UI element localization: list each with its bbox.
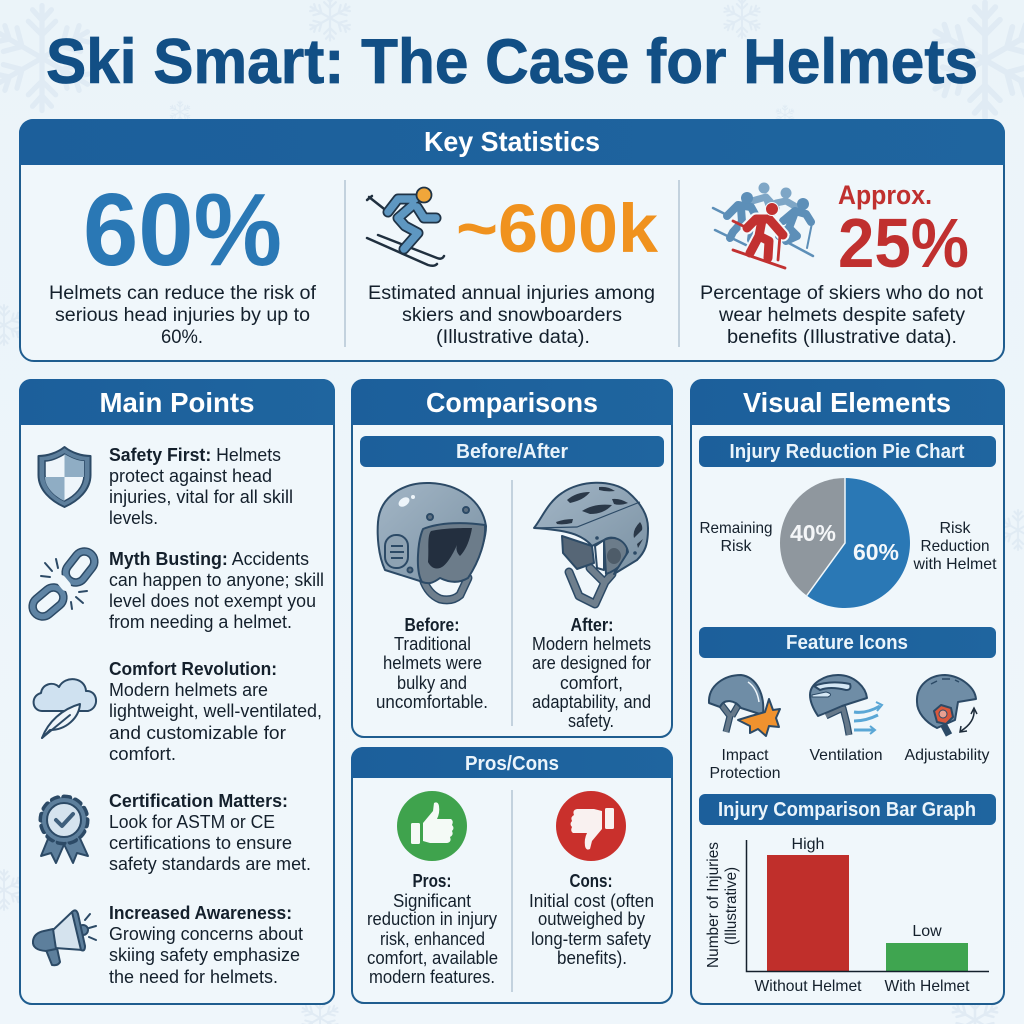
panel: comparisons: helmets were — [383, 653, 482, 673]
point: safety first: protect against head — [109, 466, 272, 486]
pie chart: Reduction — [920, 538, 990, 555]
panel: comparisons: are designed for — [532, 653, 651, 673]
panel: visual elements: Impact — [722, 747, 769, 764]
icon: skier — [367, 188, 444, 266]
point: myth busting: level does not exempt you — [109, 591, 316, 611]
point: myth busting: can happen to anyone; skill — [109, 570, 324, 590]
panel: pros and cons: Pros: — [412, 871, 452, 891]
point: increased awareness: Increased Awareness: — [109, 903, 292, 923]
panel: pros and cons: Cons: — [570, 871, 612, 891]
subheading: pie chart — [699, 436, 996, 467]
icon: broken chain — [29, 547, 98, 621]
icon: cloud and feather — [34, 679, 96, 738]
stat: 25 percent: Approx. — [838, 180, 932, 210]
heading: comparisons: Comparisons — [426, 387, 598, 418]
point: certification matters: Look for ASTM or CE — [109, 812, 275, 832]
panel: comparisons — [351, 379, 673, 737]
icon: ventilation — [810, 675, 882, 735]
panel: visual elements: Adjustability — [904, 747, 990, 764]
point: certification matters: certifications to ensure — [109, 833, 292, 853]
stat: 60 percent — [49, 172, 317, 348]
bar chart: Number of Injuries — [705, 842, 722, 968]
subheading: feature icons — [699, 627, 996, 658]
icon: award badge — [41, 797, 88, 863]
panel: pros and cons: long-term safety — [531, 929, 651, 949]
stat: 60 percent: 60% — [83, 172, 282, 287]
stat: 60 percent: 60%. — [161, 327, 203, 348]
subheading: before/after — [360, 436, 664, 467]
panel: pros and cons — [351, 747, 673, 1003]
stat: 25 percent: 25% — [838, 204, 969, 282]
panel: pros and cons: comfort, available — [367, 948, 498, 968]
point: comfort revolution: Modern helmets are — [109, 680, 268, 700]
pie chart: 40% — [790, 520, 836, 546]
panel: pros and cons: Significant — [393, 891, 471, 911]
heading: main points: Main Points — [100, 387, 254, 418]
point: myth busting: Myth Busting: Accidents — [109, 549, 309, 569]
pie chart: Remaining — [700, 520, 772, 537]
point: comfort revolution: comfort. — [109, 744, 176, 764]
stat: 600k injuries: ~600k — [456, 190, 659, 267]
heading: visual elements: Visual Elements — [743, 387, 951, 418]
panel: comparisons: safety. — [568, 711, 614, 731]
point: increased awareness: skiing safety emphasize — [109, 945, 300, 965]
point: comfort revolution: Comfort Revolution: — [109, 659, 277, 679]
panel: comparisons: adaptability, and — [532, 692, 651, 712]
panel: comparisons: uncomfortable. — [376, 692, 488, 712]
subheading: bar graph: Injury Comparison Bar Graph — [718, 799, 976, 821]
stat: 600k injuries: skiers and snowboarders — [402, 305, 622, 326]
panel: pros and cons: outweighed by — [538, 909, 645, 929]
stat: 60 percent: Helmets can reduce the risk of — [49, 283, 317, 304]
panel: pros and cons: reduction in injury — [367, 909, 497, 929]
point: increased awareness: Growing concerns about — [109, 924, 303, 944]
icon: shield — [38, 447, 90, 507]
panel: comparisons: Modern helmets — [532, 634, 651, 654]
point: certification matters: Certification Matters: — [109, 791, 288, 811]
pie chart: with Helmet — [913, 556, 997, 573]
title: Ski Smart: The Case for Helmets — [46, 27, 978, 97]
panel: pros and cons: Initial cost (often — [529, 891, 654, 911]
point: increased awareness — [33, 903, 303, 987]
panel: pros and cons: risk, enhanced — [380, 929, 485, 949]
panel: pros and cons: benefits). — [557, 948, 627, 968]
point: myth busting — [29, 547, 324, 632]
stat: 600k injuries: Estimated annual injuries among — [368, 283, 655, 304]
icon: modern helmet — [534, 483, 648, 604]
panel: comparisons: Traditional — [394, 634, 471, 654]
stat: 25 percent — [700, 180, 984, 348]
pie chart: Risk — [720, 538, 753, 555]
panel: visual elements — [690, 379, 1005, 1004]
heading: pros/cons: Pros/Cons — [465, 753, 559, 775]
point: safety first: injuries, vital for all skill — [109, 487, 293, 507]
subheading: bar graph — [699, 794, 996, 825]
subheading: feature icons: Feature Icons — [786, 632, 908, 654]
panel: visual elements: Ventilation — [810, 747, 882, 764]
panel: comparisons: bulky and — [397, 673, 467, 693]
pie chart: Risk — [939, 520, 972, 537]
stat: 25 percent: Percentage of skiers who do not — [700, 283, 984, 304]
icon: adjustability — [917, 675, 977, 735]
bar chart — [705, 836, 989, 995]
point: certification matters: safety standards are met. — [109, 854, 311, 874]
subheading: pie chart: Injury Reduction Pie Chart — [730, 441, 965, 463]
icon: impact protection — [709, 675, 780, 736]
panel: comparisons: comfort, — [560, 673, 623, 693]
pie chart: 60% — [853, 539, 899, 565]
bar chart: High — [792, 836, 824, 853]
icon: thumbs up — [397, 791, 467, 861]
panel: comparisons: Before: — [404, 615, 460, 635]
point: comfort revolution: lightweight, well-ventilated, — [109, 701, 322, 721]
stat: 600k injuries — [367, 188, 659, 348]
stat: 60 percent: serious head injuries by up to — [55, 305, 310, 326]
stat: 25 percent: benefits (Illustrative data). — [727, 327, 957, 348]
icon: group of skiers — [713, 182, 813, 268]
pie chart — [700, 478, 997, 608]
point: myth busting: from needing a helmet. — [109, 612, 292, 632]
point: safety first: Safety First: Helmets — [109, 445, 281, 465]
panel: pros and cons: modern features. — [369, 967, 495, 987]
icon: megaphone — [33, 910, 96, 965]
point: safety first: levels. — [109, 508, 158, 528]
bar chart: (Illustrative) — [723, 867, 740, 945]
subheading: before/after: Before/After — [456, 441, 568, 463]
point: comfort revolution: and customizable for — [109, 723, 286, 743]
icon: thumbs down — [556, 791, 626, 861]
icon: traditional helmet — [378, 483, 486, 600]
point: increased awareness: the need for helmets. — [109, 967, 278, 987]
panel: visual elements: Protection — [710, 765, 780, 782]
point: certification matters — [41, 791, 311, 874]
bar chart: With Helmet — [884, 978, 970, 995]
panel: key statistics — [19, 119, 1005, 361]
stat: 25 percent: wear helmets despite safety — [718, 305, 966, 326]
point: safety first — [38, 445, 293, 528]
bar chart: Low — [912, 923, 942, 940]
panel: comparisons: After: — [570, 615, 614, 635]
heading: key statistics: Key Statistics — [424, 126, 600, 157]
bar chart: Without Helmet — [754, 978, 862, 995]
stat: 600k injuries: (Illustrative data). — [436, 327, 590, 348]
panel: main points — [19, 379, 335, 1004]
point: comfort revolution — [34, 659, 322, 764]
